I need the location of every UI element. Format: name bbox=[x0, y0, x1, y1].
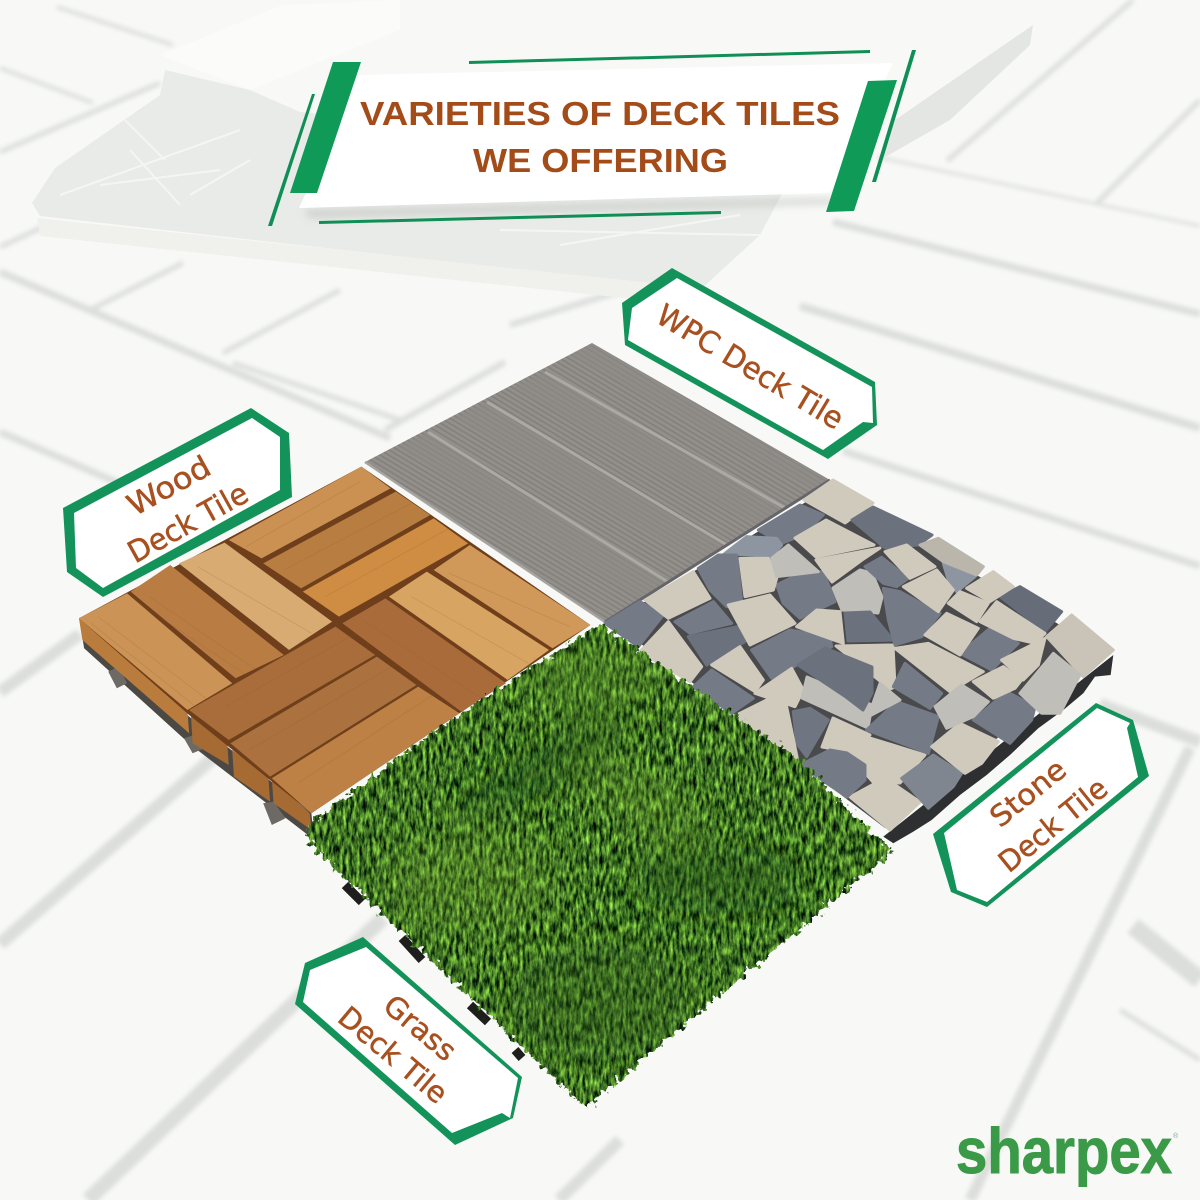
logo: sharpex bbox=[956, 1115, 1179, 1187]
wood label panel bbox=[74, 418, 280, 588]
grass tile black clips bbox=[345, 885, 522, 1058]
right thin line bbox=[872, 50, 916, 182]
WPC inner edge bbox=[605, 480, 830, 622]
grass label line 2: Deck Tile bbox=[332, 1000, 454, 1110]
right green bar bbox=[826, 80, 897, 212]
left thin line bbox=[268, 94, 315, 226]
wood label line 1: Wood bbox=[121, 449, 217, 524]
dark stones left bbox=[605, 505, 835, 757]
WPC smooth plank strips bbox=[398, 343, 830, 600]
stone label line 1: Stone bbox=[983, 752, 1073, 834]
grass label panel bbox=[303, 947, 518, 1133]
grass texture bbox=[306, 624, 892, 1108]
WPC label frame bbox=[622, 268, 877, 459]
banner panel bbox=[299, 63, 893, 208]
title line 1: VARIETIES OF DECK TILES bbox=[360, 95, 840, 132]
stone label line 2: Deck Tile bbox=[992, 771, 1114, 879]
stone deck tile bbox=[605, 480, 1113, 830]
wood plank tops bbox=[79, 467, 590, 813]
wood gaps bbox=[79, 467, 590, 813]
label: grass deck tile bbox=[295, 937, 522, 1145]
wood deck tile bbox=[79, 467, 590, 835]
cream stones right bbox=[885, 538, 1113, 773]
WPC tile surface bbox=[365, 343, 830, 622]
grass label frame bbox=[295, 937, 522, 1145]
wood plank sides bbox=[79, 618, 311, 830]
wood grain bbox=[91, 482, 570, 783]
grass label line 1: Grass bbox=[377, 988, 463, 1068]
WPC front edge bbox=[365, 462, 605, 622]
wood tile connectors bbox=[81, 627, 313, 835]
bottom green line bbox=[319, 211, 721, 224]
dark stones right bbox=[865, 557, 1062, 808]
grey middle stones bbox=[802, 570, 882, 728]
wood label frame bbox=[63, 408, 292, 597]
cream middle stones bbox=[795, 480, 925, 830]
logo registered mark: ® bbox=[1173, 1132, 1179, 1140]
WPC label text: WPC Deck Tile bbox=[650, 298, 850, 437]
top green line bbox=[469, 50, 870, 64]
label: WPC deck tile bbox=[622, 268, 877, 459]
wood label line 2: Deck Tile bbox=[122, 476, 254, 571]
banner shadow bbox=[303, 198, 838, 218]
left green bar bbox=[290, 62, 361, 193]
stones crossing the middle bbox=[795, 480, 932, 830]
grass deck tile bbox=[306, 624, 892, 1108]
title line 2: WE OFFERING bbox=[473, 142, 728, 179]
title banner bbox=[268, 50, 916, 226]
label: wood deck tile bbox=[63, 408, 292, 597]
cream stones left bbox=[640, 545, 843, 763]
grass light and shadow bbox=[380, 645, 810, 1060]
stone label frame bbox=[933, 703, 1149, 907]
stones, left part bbox=[605, 505, 843, 763]
WPC deck tile bbox=[365, 343, 830, 622]
label: stone deck tile bbox=[933, 703, 1149, 907]
WPC plank joins bbox=[428, 372, 785, 582]
ghosted plastic tile base bbox=[32, 0, 1033, 305]
light stones right bbox=[868, 653, 1080, 728]
dark middle stones bbox=[798, 507, 932, 797]
stone label panel bbox=[944, 708, 1138, 902]
stone tile grout bbox=[612, 487, 1105, 828]
WPC label panel bbox=[628, 278, 873, 450]
stone deck tile base bbox=[883, 655, 1113, 843]
stones, right part bbox=[865, 538, 1113, 808]
logo wordmark: sharpex bbox=[956, 1115, 1172, 1187]
